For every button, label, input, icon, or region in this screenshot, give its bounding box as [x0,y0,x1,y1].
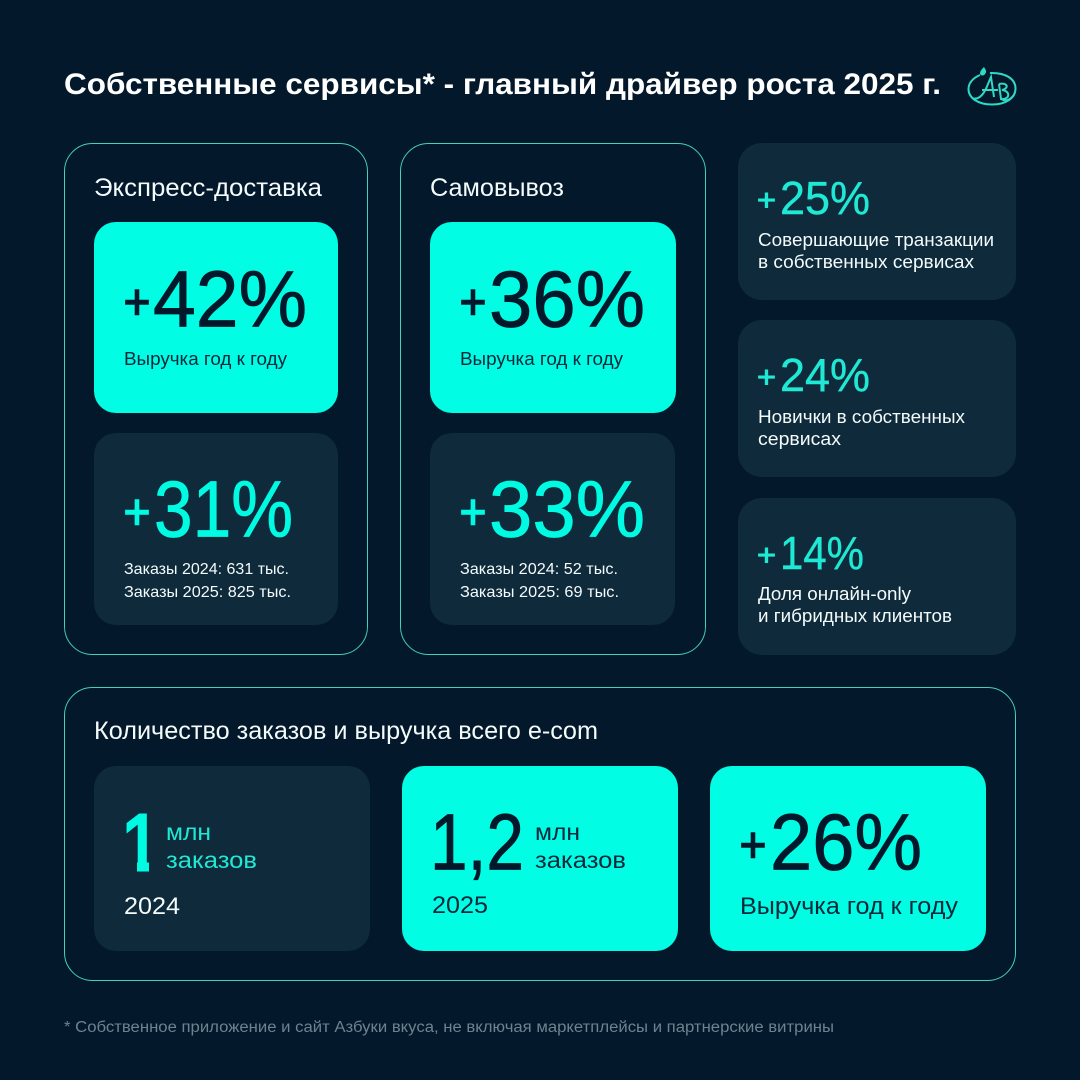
card: pickup revenue: 36% [489,254,645,344]
card: e-com revenue: + [740,817,766,873]
card: orders 2024: 2024 [124,893,180,920]
card: pickup revenue: Выручка год к году [460,348,624,369]
card: e-com revenue [710,766,986,951]
card: transacting users [738,143,1016,300]
icon: AB logo [968,67,1016,104]
panel: total e-com [64,688,1016,980]
card: express revenue [94,222,338,413]
card: pickup orders: + [460,484,486,540]
card: orders 2024: 1 [121,798,161,887]
card: express orders: Заказы 2024: 631 тыс. [124,561,289,578]
card: express orders: 31% [154,464,293,554]
card: orders 2024: заказов [166,847,257,873]
card: pickup revenue: + [460,274,486,330]
card: express revenue: + [124,274,150,330]
card: transacting users: + [757,184,776,217]
card: pickup orders: 33% [489,464,645,554]
card: transacting users: 25% [780,172,870,224]
heading: pickup: Самовывоз [430,174,564,202]
card: orders 2025: млн [535,819,580,845]
card: express orders [94,433,338,625]
card: pickup orders [430,433,675,625]
card: e-com revenue: Выручка год к году [740,893,959,920]
card: orders 2025: 2025 [432,892,488,919]
card: newcomers [738,320,1016,477]
card: orders 2024: млн [166,819,211,845]
card: newcomers: Новички в собственных [758,407,965,427]
footnote: * Собственное приложение и сайт Азбуки вкуса, не включая маркетплейсы и партнерские витрины [64,1019,834,1036]
card: online-only share [738,498,1016,655]
card: transacting users: в собственных сервисах [758,252,974,272]
card: express orders: Заказы 2025: 825 тыс. [124,584,291,601]
card: online-only share: и гибридных клиентов [758,606,952,626]
card: online-only share: 14% [780,527,864,579]
card: express revenue: 42% [153,254,307,344]
card: newcomers: сервисах [758,429,841,449]
title: Собственные сервисы* - главный драйвер роста 2025 г. [64,68,941,101]
card: express orders: + [124,484,150,540]
card: orders 2025: 1,2 [430,798,524,886]
card: online-only share: Доля онлайн-only [758,584,911,604]
card: pickup orders: Заказы 2024: 52 тыс. [460,561,618,578]
card: online-only share: + [757,539,776,572]
card: orders 2025 [402,766,678,951]
card: newcomers: + [757,361,776,394]
heading: total e-com: Количество заказов и выручка всего e-com [94,717,598,745]
card: e-com revenue: 26% [770,798,922,886]
heading: express delivery: Экспресс-доставка [94,174,322,202]
card: transacting users: Совершающие транзакции [758,230,994,250]
panel: express delivery [64,144,368,654]
card: pickup orders: Заказы 2025: 69 тыс. [460,584,619,601]
card: pickup revenue [430,222,676,413]
card: newcomers: 24% [780,349,870,401]
panel: pickup [400,144,706,654]
card: orders 2024 [94,766,370,951]
card: orders 2025: заказов [535,847,626,873]
card: express revenue: Выручка год к году [124,348,288,369]
